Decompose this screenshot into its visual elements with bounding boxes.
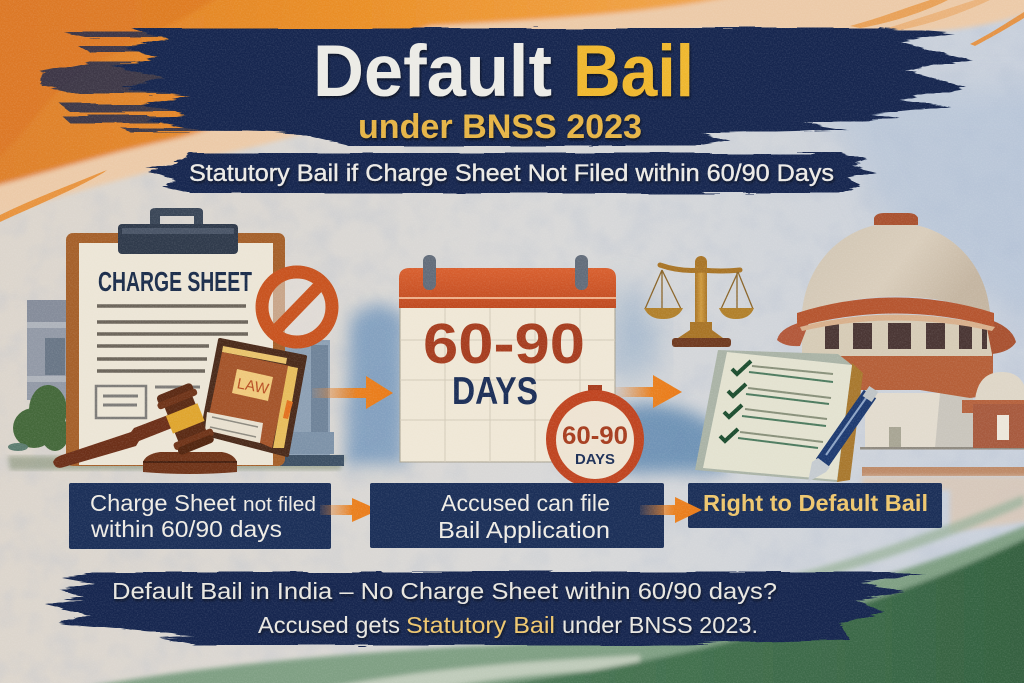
blue washes: [820, 90, 1024, 340]
icon: clock badge: [546, 385, 644, 488]
subtitle: under BNSS 2023: [358, 108, 642, 146]
icon: supreme court dome: [777, 213, 1024, 450]
step box 2: Accused can file: [441, 490, 610, 516]
tagline banner: Statutory Bail if Charge Sheet Not Filed within 60/90 Days: [189, 160, 834, 187]
step box 3: Right to Default Bail: [703, 490, 928, 516]
calendar days label: DAYS: [452, 370, 538, 413]
bottom text: [112, 578, 777, 638]
icon: law book: LAW: [236, 375, 271, 398]
icon: scales of justice: [644, 256, 754, 347]
icon: checklist document: [695, 350, 863, 482]
bottom text: under BNSS 2023.: [562, 612, 758, 638]
charge sheet heading: CHARGE SHEET: [98, 266, 252, 297]
icon: law book: [202, 340, 305, 455]
icon: clipboard charge sheet: [66, 208, 285, 466]
step box 1: within 60/90 days: [90, 516, 282, 542]
bottom text: Default Bail in India – No Charge Sheet within 60/90 days?: [112, 578, 777, 604]
title: Bail: [573, 31, 694, 112]
icon: pen: [808, 391, 875, 482]
step box 1: [69, 483, 331, 549]
icon: clock badge: DAYS: [575, 451, 615, 468]
icon: clock badge: 60-90: [562, 422, 628, 450]
tagline banner: [145, 153, 876, 193]
title banner brush stroke: [40, 28, 972, 146]
bottom text: Accused gets: [258, 612, 400, 638]
arrow: lower 1: [320, 498, 379, 522]
ground strips: [8, 456, 345, 470]
title: Default: [313, 31, 552, 112]
bottom text: Statutory Bail: [406, 612, 555, 638]
step box 3: [688, 483, 942, 528]
bottom banner brush stroke: [45, 572, 927, 645]
icon: calendar: [399, 255, 616, 462]
step box 2: [370, 483, 664, 548]
icon: prohibition sign: [262, 272, 332, 342]
step box 1: not filed: [243, 494, 316, 516]
step box 2: Bail Application: [438, 517, 610, 543]
green sweep: [770, 495, 1024, 590]
calendar number: 60-90: [423, 312, 585, 376]
icon: court building left: [27, 300, 344, 466]
arrow: top 2: [615, 375, 682, 408]
step box 1: Charge Sheet: [90, 490, 237, 516]
title: [313, 31, 694, 112]
arrow: top 1: [312, 376, 393, 409]
icon: gavel: [53, 381, 237, 474]
icon: bush: [8, 385, 69, 451]
arrow: lower 2: [640, 497, 702, 523]
